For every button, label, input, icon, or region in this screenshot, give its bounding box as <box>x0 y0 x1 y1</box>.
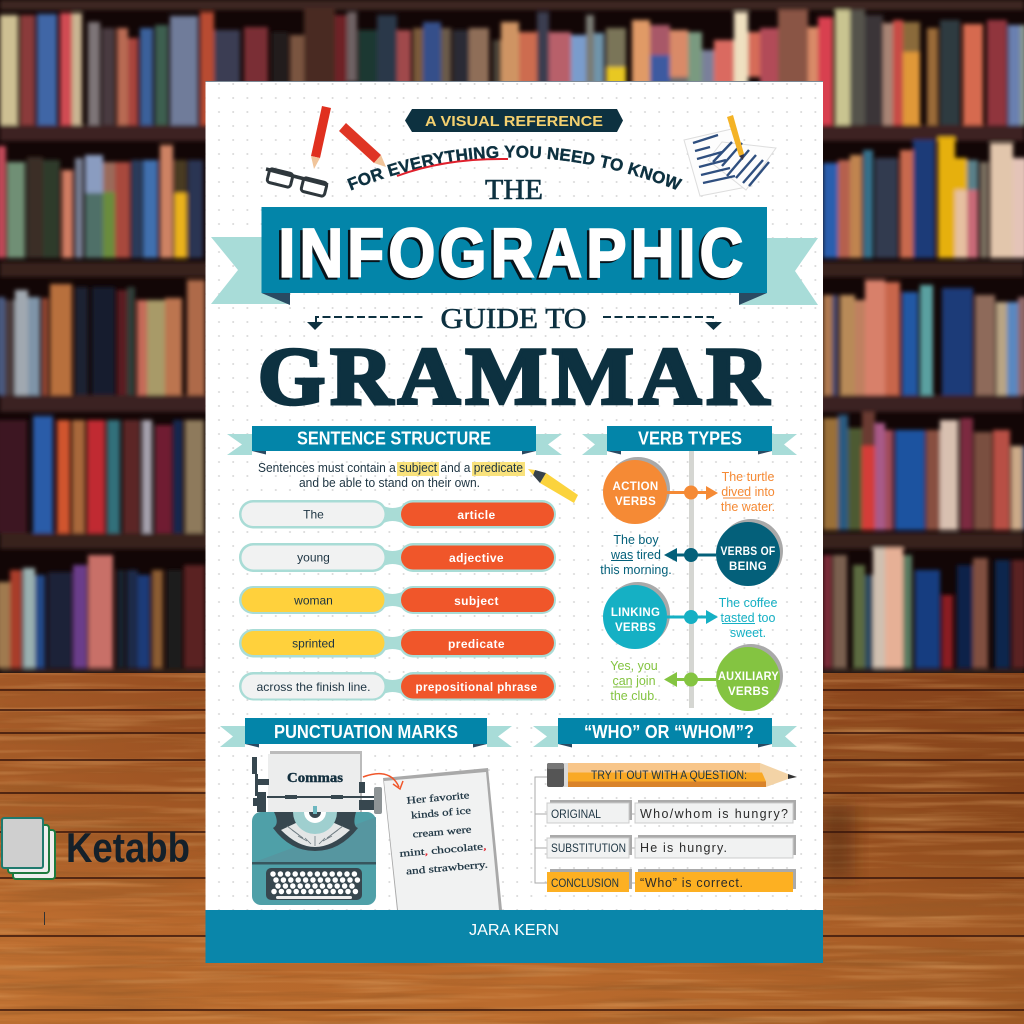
heading: punctuation marks <box>220 718 512 748</box>
verb: linking: tasted too <box>721 611 775 625</box>
note: comma example: and strawberry. <box>406 859 488 878</box>
main banner: INFOGRAPHIC <box>278 214 748 292</box>
sentence pills: adjective <box>449 551 504 565</box>
verb: auxiliary: can join <box>612 674 656 688</box>
illustration: typewriter: Commas <box>287 770 343 785</box>
watermark logo: Ketabb <box>2 818 190 925</box>
row: conclusion <box>547 869 796 892</box>
heading: punctuation marks: PUNCTUATION MARKS <box>274 722 458 742</box>
verb: action: dived into <box>721 485 775 499</box>
sentence pills <box>239 500 556 700</box>
arrow: typewriter to note <box>363 774 403 789</box>
sentence pills: young <box>297 550 330 564</box>
heading: who or whom <box>533 718 797 748</box>
sentence pills: article <box>457 508 496 522</box>
row: substitution: He is hungry. <box>640 841 727 855</box>
intro text with highlights: and be able to stand on their own. <box>299 476 480 490</box>
verb: being: VERBS OF <box>720 546 776 558</box>
watermark logo: Ketabb: Ketabb <box>66 824 190 871</box>
curved subtitle: FOR EVERYTHING YOU NEED TO KNOW <box>347 146 683 190</box>
title: THE: THE <box>485 175 543 206</box>
icon: glasses <box>266 168 328 197</box>
sentence pills: sprinted <box>292 636 335 650</box>
verb: auxiliary: Yes, you <box>610 659 658 673</box>
title: GRAMMAR: GRAMMAR <box>258 330 774 422</box>
title: guide to with arrows: GUIDE TO <box>440 304 586 335</box>
footer: author band: JARA KERN <box>469 922 559 939</box>
verb: auxiliary <box>610 644 783 711</box>
verb: being: this morning. <box>600 563 672 577</box>
verb: being: BEING <box>729 561 767 573</box>
panel: punctuation marks <box>220 718 512 910</box>
verb: being: was tired <box>610 548 661 562</box>
sentence pills: prepositional phrase <box>416 680 538 694</box>
note: comma example <box>383 768 502 910</box>
verb: action <box>603 457 775 524</box>
verb: linking: VERBS <box>615 622 656 634</box>
panel: sentence structure <box>227 426 578 700</box>
heading: verb types: VERB TYPES <box>638 428 742 448</box>
intro text with highlights <box>258 461 525 490</box>
sentence pills: The <box>303 508 324 522</box>
panel: verb types <box>582 426 797 711</box>
verb: linking <box>603 582 777 649</box>
icon: highlighter <box>528 469 578 503</box>
main banner: INFOGRAPHIC <box>276 216 745 294</box>
verb: auxiliary: AUXILIARY <box>718 671 779 683</box>
sentence pills: across the finish line. <box>256 680 370 694</box>
verb: linking: The coffee <box>719 596 777 610</box>
row: original <box>547 800 796 823</box>
main banner <box>211 207 818 305</box>
sentence pills: predicate <box>448 637 505 651</box>
intro text with highlights: Sentences must contain a subject and a predicate <box>258 461 523 475</box>
note: comma example: kinds of ice <box>411 805 472 822</box>
row: conclusion: CONCLUSION <box>551 878 619 890</box>
row: conclusion: “Who” is correct. <box>640 876 743 890</box>
row: substitution: SUBSTITUTION <box>551 843 626 855</box>
note: comma example: mint , chocolate , <box>399 841 487 860</box>
verb: auxiliary: VERBS <box>728 686 769 698</box>
verb: auxiliary: the club. <box>610 689 658 703</box>
verb: action: ACTION <box>613 481 658 493</box>
row: original: Who/whom is hungry? <box>640 807 788 821</box>
verb: being: The boy <box>613 533 659 547</box>
icon: red pencils <box>311 106 386 169</box>
background: wooden table <box>0 673 1024 1024</box>
heading: sentence structure: SENTENCE STRUCTURE <box>297 428 491 448</box>
row: substitution <box>547 835 796 858</box>
note: comma example: Her favorite <box>406 790 471 807</box>
verb: linking: LINKING <box>611 607 660 619</box>
row: original: ORIGINAL <box>551 809 602 821</box>
note: comma example: cream were <box>412 824 473 841</box>
icon: pencil with question: TRY IT OUT WITH A QUESTION: <box>591 770 747 782</box>
heading: sentence structure <box>227 426 562 455</box>
verb: action: The turtle <box>722 470 774 484</box>
icon: paper with pencil <box>684 115 776 196</box>
verb: linking: sweet. <box>730 626 766 640</box>
footer: author band <box>206 910 823 963</box>
badge: a visual reference: A VISUAL REFERENCE <box>425 113 603 130</box>
book cover <box>206 81 823 963</box>
sentence pills: woman <box>293 594 333 608</box>
verb: action: the water. <box>721 500 775 514</box>
illustration: typewriter <box>252 751 382 905</box>
badge: a visual reference <box>405 109 623 132</box>
sentence pills: subject <box>454 594 499 608</box>
heading: verb types <box>582 426 797 455</box>
background: blurred bookshelf <box>0 0 1024 675</box>
verb: being <box>600 519 783 586</box>
heading: who or whom: “WHO” OR “WHOM”? <box>584 722 754 742</box>
title: guide to with arrows <box>307 304 722 335</box>
verb: action: VERBS <box>615 496 656 508</box>
icon: pencil with question <box>547 763 797 787</box>
timeline bar <box>689 451 694 708</box>
panel: who or whom <box>533 718 797 892</box>
tree connector lines <box>535 777 635 883</box>
